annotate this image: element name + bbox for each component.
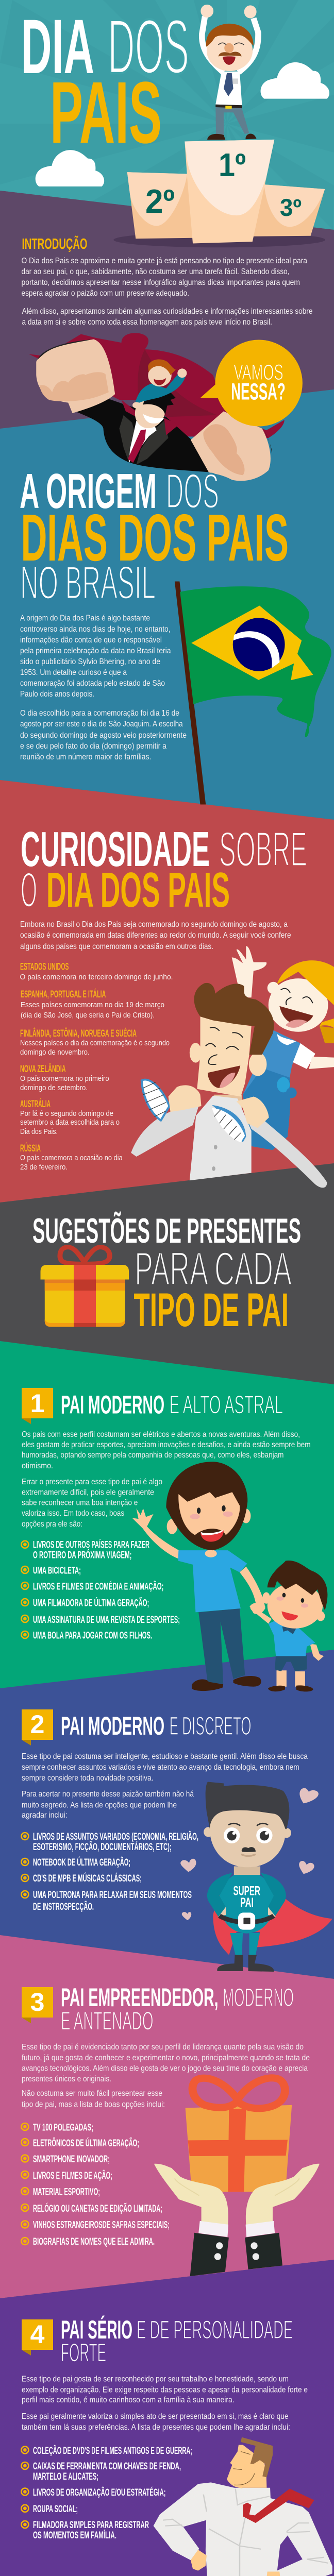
gift list: MATERIAL ESPORTIVO; bbox=[33, 2187, 100, 2198]
panel: father type 1 bbox=[21, 1388, 327, 1691]
description: sempre considere toda novidade positiva. bbox=[22, 1774, 154, 1783]
gift list: UMA POLTRONA PARA RELAXAR EM SEUS MOMENTOS bbox=[33, 1889, 192, 1901]
list of countries and dates: Dia dos Pais. bbox=[20, 1128, 58, 1136]
title bbox=[21, 3, 189, 162]
intro text: O Dia dos Pais se aproxima e muita gente já está pensando no tipo de presente ideal para bbox=[22, 257, 307, 265]
intro text: dar ao seu pai, o que, sabidamente, não costuma ser uma tarefa fácil. Sabendo disso, bbox=[22, 267, 290, 276]
origin text: Paulo dois anos depois. bbox=[20, 690, 94, 699]
origin text: agosto por ser este o dia de São Joaquim. A escolha bbox=[20, 720, 183, 728]
heading: DOS bbox=[166, 464, 219, 519]
speech bubble text: NESSA? bbox=[231, 378, 286, 404]
panel: title header bbox=[21, 3, 329, 327]
heading bbox=[61, 2315, 293, 2367]
list of countries and dates: (dia de São José, que seria o Pai de Cristo). bbox=[21, 1011, 155, 1020]
gift list: SMARTPHONE INOVADOR; bbox=[33, 2154, 110, 2165]
gift list bbox=[21, 1831, 198, 1912]
number badge: 4 bbox=[30, 2320, 45, 2349]
gift list bbox=[21, 2445, 192, 2541]
list of countries and dates: Nesses países o dia da comemoração é o segundo bbox=[20, 1039, 170, 1047]
description: Esse tipo de pai gosta de ser reconhecido por seu trabalho e honestidade, sendo um bbox=[22, 2375, 289, 2383]
list of countries and dates: setembro a data escolhida para o bbox=[20, 1118, 120, 1127]
panel: gift suggestions header bbox=[32, 1211, 301, 1336]
description: humoradas, optando sempre pela companhia de pessoas que, como eles, esbanjam bbox=[22, 1451, 283, 1460]
list of countries and dates: domingo de setembro. bbox=[20, 1084, 88, 1092]
origin text bbox=[20, 614, 187, 761]
text on suit bbox=[233, 1884, 260, 1910]
description: otimismo. bbox=[22, 1462, 53, 1470]
list of countries and dates: 23 de fevereiro. bbox=[20, 1163, 68, 1172]
description: opções pra ele são: bbox=[22, 1520, 82, 1529]
icon: gift box bbox=[41, 1247, 129, 1327]
list of countries and dates: O país comemora a ocasião no dia bbox=[20, 1154, 123, 1162]
gift list: LIVROS E FILMES DE AÇÃO; bbox=[33, 2170, 112, 2181]
heading: O bbox=[21, 862, 37, 918]
gift list: NOTEBOOK DE ÚLTIMA GERAÇÃO; bbox=[33, 1856, 130, 1868]
origin text: controverso ainda nos dias de hoje, no entanto, bbox=[20, 625, 171, 634]
intro text: portanto, decidimos apresentar nesse infográfico algumas dicas importantes para quem bbox=[22, 278, 300, 287]
podium numbers: 1º bbox=[219, 146, 246, 183]
origin text: do segundo domingo de agosto veio posteriormente bbox=[20, 731, 187, 740]
title: PAIS bbox=[50, 64, 162, 162]
heading: PAI SÉRIO bbox=[61, 2315, 132, 2344]
intro text: a data em si e sobre como toda essa homenagem aos pais teve início no Brasil. bbox=[22, 318, 272, 327]
heading: PAI EMPREENDEDOR, bbox=[61, 1983, 219, 2012]
number badge: 1 bbox=[30, 1389, 44, 1418]
number badge bbox=[22, 1987, 53, 2023]
illustration: happy father on podium bbox=[201, 5, 258, 140]
origin text: reunião de um número maior de famílias. bbox=[20, 753, 151, 761]
description: Esse tipo de pai costuma ser inteligente, estudioso e bastante gentil. Além disso ele busca bbox=[22, 1752, 308, 1761]
description: tipo de pai, mas a lista de boas opções inclui: bbox=[22, 2100, 165, 2109]
gift list: LIVROS DE ORGANIZAÇÃO E/OU ESTRATÉGIA; bbox=[33, 2486, 166, 2498]
gift list: TV 100 POLEGADAS; bbox=[33, 2122, 93, 2133]
illustration: super father flying with son bbox=[29, 333, 303, 481]
panel: father type 2 bbox=[21, 1709, 332, 1972]
number badge bbox=[22, 2319, 53, 2355]
description: extremamente difícil, pois ele geralmente bbox=[22, 1488, 154, 1497]
podium numbers: 3º bbox=[280, 194, 302, 221]
illustration: Brazilian flag bbox=[175, 582, 331, 804]
number badge bbox=[22, 1388, 53, 1424]
text on suit: SUPER bbox=[233, 1884, 260, 1899]
panel: origin bbox=[20, 464, 331, 804]
number badge: 2 bbox=[30, 1710, 44, 1739]
gift list: DE INSTROSPECÇÃO. bbox=[33, 1901, 94, 1912]
description: presentes únicos e originais. bbox=[22, 2075, 111, 2083]
description: muito segredo. As lista de opções que podem lhe bbox=[22, 1801, 177, 1809]
gift list: LIVROS DE ASSUNTOS VARIADOS (ECONOMIA, RELIGIÃO, bbox=[33, 1831, 198, 1842]
gift list: CAIXAS DE FERRAMENTA COM CHAVES DE FENDA, bbox=[33, 2461, 181, 2472]
heading bbox=[21, 822, 307, 918]
speech bubble text bbox=[231, 360, 286, 404]
origin text: O dia escolhido para a comemoração foi dia 16 de bbox=[20, 709, 179, 718]
intro text bbox=[22, 257, 312, 327]
origin text: informações dão conta de que o responsável bbox=[20, 636, 162, 645]
podium numbers: 2º bbox=[145, 182, 175, 220]
illustration: serious father bbox=[154, 2437, 332, 2576]
description bbox=[22, 1430, 311, 1529]
list of countries and dates: NOVA ZELÂNDIA bbox=[20, 1062, 66, 1075]
gift list: FILMADORA SIMPLES PARA REGISTRAR bbox=[33, 2519, 149, 2531]
description: Esse tipo de pai é evidenciado tanto por seu perfil de liderança quanto pela sua visão do bbox=[22, 2043, 304, 2052]
gift list: UMA FILMADORA DE ÚLTIMA GERAÇÃO; bbox=[33, 1597, 149, 1609]
gift list: LIVROS DE OUTROS PAÍSES PARA FAZER bbox=[33, 1539, 149, 1551]
list of countries and dates: domingo de novembro. bbox=[20, 1048, 90, 1057]
illustration: clouds bbox=[36, 62, 329, 187]
illustration: father with daughter on shoulders bbox=[131, 946, 334, 1188]
gift list: ROUPA SOCIAL; bbox=[33, 2503, 78, 2515]
gift list: UMA BOLA PARA JOGAR COM OS FILHOS. bbox=[33, 1630, 152, 1641]
speech bubble text: VAMOS bbox=[233, 360, 283, 385]
heading bbox=[61, 1983, 294, 2035]
list of countries and dates: O país comemora no terceiro domingo de junho. bbox=[20, 973, 173, 981]
origin text: comemoração foi adotada pelo estado de São bbox=[20, 679, 165, 688]
origin text: e se deu pelo fato do dia (domingo) permitir a bbox=[20, 742, 166, 751]
illustration: super father with cape and hearts bbox=[180, 1782, 332, 1972]
description: agradar inclui: bbox=[22, 1811, 68, 1820]
gift list: OS MOMENTOS EM FAMÍLIA. bbox=[33, 2529, 116, 2541]
panel: father type 3 bbox=[21, 1983, 320, 2276]
origin text: sido o publicitário Sylvio Bhering, no ano de bbox=[20, 657, 160, 666]
description: Esse pai geralmente valoriza o simples ato de ser presentado em si, mas é claro que bbox=[22, 2412, 289, 2421]
description: Errar o presente para esse tipo de pai é algo bbox=[22, 1478, 162, 1486]
list of countries and dates: AUSTRÁLIA bbox=[20, 1098, 51, 1110]
illustration: bearded father and son bbox=[132, 1462, 327, 1691]
heading bbox=[32, 1211, 301, 1336]
intro heading: INTRODUÇÃO bbox=[22, 235, 88, 252]
description: também tem lá suas preferências. A lista de presentes que podem lhe agradar inclui: bbox=[22, 2423, 290, 2432]
podium numbers bbox=[145, 146, 302, 221]
heading: PAI MODERNO bbox=[61, 1391, 164, 1419]
list of countries and dates: ESTADOS UNIDOS bbox=[20, 961, 69, 973]
heading: PAI MODERNO bbox=[61, 1711, 164, 1740]
gift list: UMA ASSINATURA DE UMA REVISTA DE ESPORTES; bbox=[33, 1614, 180, 1625]
description: sempre conhecer assuntos variados e vive atento ao avanço da tecnologia, embora nem bbox=[22, 1763, 299, 1772]
list of countries and dates: Por lá é o segundo domingo de bbox=[20, 1110, 113, 1118]
panel: title header: DOS bbox=[108, 3, 189, 90]
origin text: A origem do Dia dos Pais é algo bastante bbox=[20, 614, 150, 622]
gift list: BIOGRAFIAS DE NOMES QUE ELE ADMIRA. bbox=[33, 2236, 155, 2247]
description: perfil mais contido, é muito carinhoso com a família à sua maneira. bbox=[22, 2396, 235, 2404]
gift list bbox=[21, 2122, 170, 2247]
description: Não costuma ser muito fácil presentear esse bbox=[22, 2089, 162, 2098]
description bbox=[22, 1752, 308, 1820]
text on suit: PAI bbox=[240, 1895, 254, 1910]
origin text: pela primeira celebração da data no Brasil teria bbox=[20, 647, 171, 655]
gift list: MARTELO E ALICATES; bbox=[33, 2471, 98, 2482]
number badge bbox=[22, 1709, 53, 1745]
gift list bbox=[21, 1539, 180, 1641]
list of countries and dates: RÚSSIA bbox=[20, 1142, 41, 1154]
intro text: espera agradar o paizão com um presente adequado. bbox=[22, 289, 189, 298]
description bbox=[22, 2043, 310, 2109]
gift list: CD'S DE MPB E MÚSICAS CLÁSSICAS; bbox=[33, 1872, 142, 1884]
list of countries and dates: O país comemora no primeiro bbox=[20, 1075, 109, 1083]
gift list: ESOTERISMO, FICÇÃO, DOCUMENTÁRIOS, ETC); bbox=[33, 1841, 172, 1853]
heading: FORTE bbox=[61, 2338, 106, 2367]
heading: E ANTENADO bbox=[61, 2006, 154, 2035]
gift list: LIVROS E FILMES DE COMÉDIA E ANIMAÇÃO; bbox=[33, 1581, 163, 1592]
number badge: 3 bbox=[30, 1988, 44, 2016]
intro text: ocasião é comemorada em datas diferentes ao redor do mundo. A seguir você confere bbox=[20, 931, 291, 940]
panel: curiosity bbox=[20, 822, 334, 1188]
panel: father type 4 bbox=[21, 2315, 332, 2576]
list of countries and dates: FINLÂNDIA, ESTÔNIA, NORUEGA E SUÉCIA bbox=[20, 1027, 137, 1039]
gift list: VINHOS ESTRANGEIROSDE SAFRAS ESPECIAIS; bbox=[33, 2219, 170, 2231]
intro text: Embora no Brasil o Dia dos Pais seja comemorado no segundo domingo de agosto, a bbox=[20, 920, 288, 929]
illustration: hands holding gift bbox=[154, 2078, 320, 2276]
gift list: RELÓGIO OU CANETAS DE EDIÇÃO LIMITADA; bbox=[33, 2202, 162, 2214]
gift list: COLEÇÃO DE DVD'S DE FILMES ANTIGOS E DE GUERRA; bbox=[33, 2445, 192, 2456]
description: sabe reconhecer uma boa intenção e bbox=[22, 1498, 138, 1507]
description: Os pais com esse perfil costumam ser elétricos e abertos a novas aventuras. Além disso, bbox=[22, 1430, 300, 1439]
list of countries and dates: ESPANHA, PORTUGAL E ITÁLIA bbox=[21, 988, 106, 1000]
heading bbox=[20, 464, 289, 609]
intro text bbox=[20, 920, 291, 951]
description: Para acertar no presente desse paizão também não há bbox=[22, 1790, 194, 1799]
gift list: UMA BICICLETA; bbox=[33, 1565, 81, 1577]
heading: NO BRASIL bbox=[20, 557, 156, 609]
title: DIA bbox=[21, 3, 94, 90]
heading: E DISCRETO bbox=[170, 1711, 252, 1740]
origin text: 1953. Um detalhe curioso é que a bbox=[20, 668, 127, 677]
illustration: podium bbox=[113, 140, 325, 247]
intro text: alguns dos países que comemoram a ocasião em outros dias. bbox=[20, 942, 213, 951]
list of countries and dates: Esses países comemoram no dia 19 de março bbox=[21, 1001, 164, 1009]
list of countries and dates bbox=[20, 961, 173, 1172]
gift list: ELETRÔNICOS DE ÚLTIMA GERAÇÃO; bbox=[33, 2137, 139, 2149]
heading: A ORIGEM bbox=[20, 464, 157, 519]
description: futuro, já que gosta de conhecer e experimentar o novo, principalmente quando se trata de bbox=[22, 2054, 310, 2062]
gift list: O ROTEIRO DA PRÓXIMA VIAGEM; bbox=[33, 1549, 131, 1561]
description: valoriza isso. Em todo caso, boas bbox=[22, 1509, 124, 1518]
description bbox=[22, 2375, 308, 2432]
